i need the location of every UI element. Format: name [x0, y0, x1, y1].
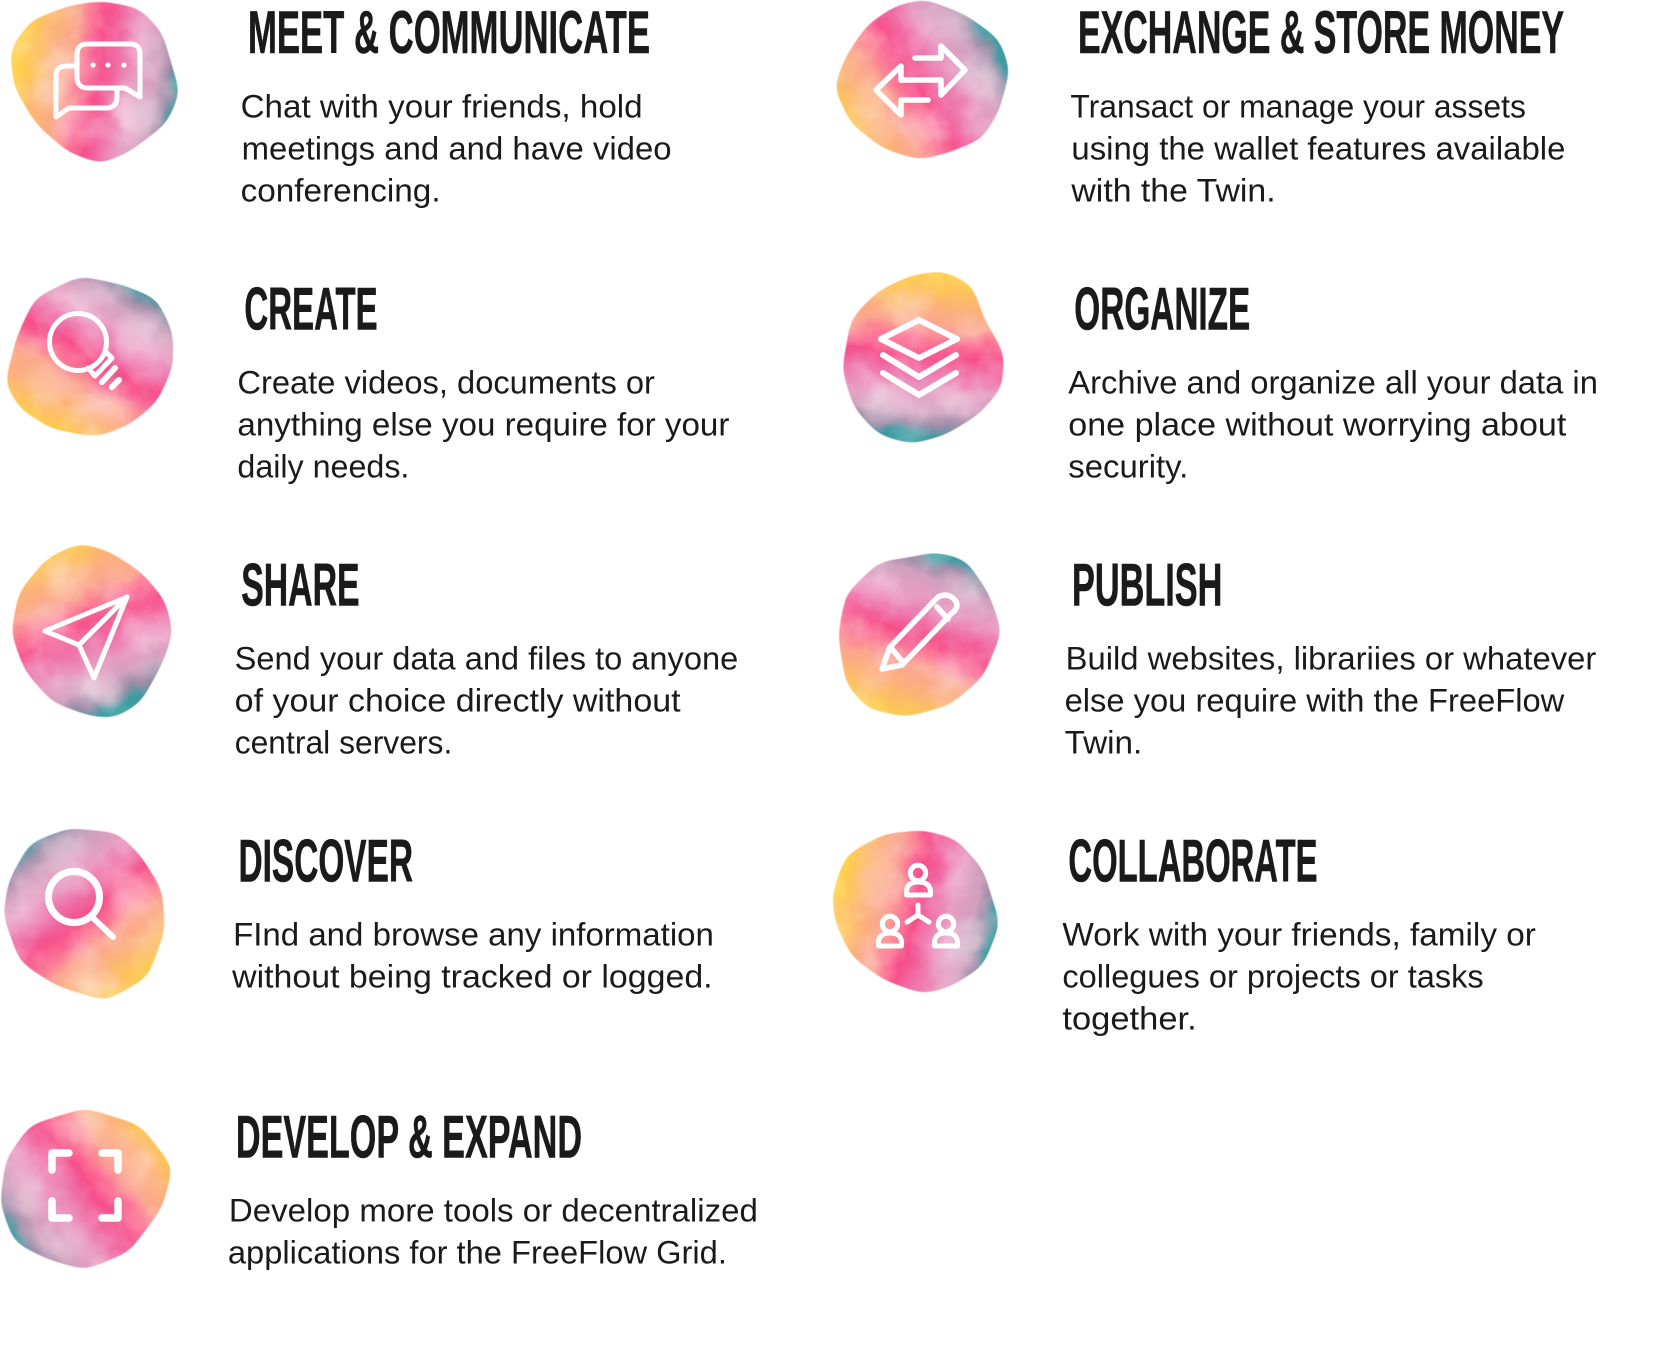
- heading: PUBLISH: [1072, 552, 1222, 618]
- text block: Create videos, documents or: [237, 364, 655, 400]
- text block: else you require with the FreeFlow: [1065, 682, 1565, 718]
- heading: CREATE: [244, 276, 378, 342]
- panel: meet and communicate: [0, 0, 672, 208]
- text block: meetings and and have video: [242, 130, 672, 166]
- text block: without being tracked or logged.: [231, 958, 713, 994]
- text block: [228, 1192, 758, 1270]
- icon: connected people: [832, 830, 998, 993]
- text block: [241, 88, 672, 208]
- text block: collegues or projects or tasks: [1062, 958, 1484, 994]
- heading: SHARE: [241, 552, 360, 618]
- text block: [1062, 916, 1536, 1036]
- panel: organize: [825, 255, 1598, 484]
- heading: ORGANIZE: [1074, 276, 1250, 342]
- text block: [1070, 88, 1565, 208]
- text block: Develop more tools or decentralized: [229, 1192, 758, 1228]
- text block: Chat with your friends, hold: [241, 88, 643, 124]
- text block: conferencing.: [241, 172, 441, 208]
- text block: [231, 916, 714, 994]
- icon: bulb: [6, 278, 174, 436]
- text block: using the wallet features available: [1071, 130, 1565, 166]
- icon: paper plane: [12, 544, 172, 718]
- text block: daily needs.: [237, 448, 409, 484]
- heading: COLLABORATE: [1068, 827, 1318, 894]
- text block: Archive and organize all your data in: [1068, 364, 1598, 400]
- text block: Transact or manage your assets: [1070, 88, 1526, 124]
- icon: layers: [842, 272, 1004, 443]
- panel: discover: [4, 828, 712, 999]
- text block: applications for the FreeFlow Grid.: [228, 1234, 727, 1270]
- text block: Send your data and files to anyone: [235, 640, 738, 676]
- text block: [1065, 640, 1597, 760]
- text block: [237, 364, 730, 484]
- text block: Work with your friends, family or: [1062, 916, 1536, 952]
- text block: with the Twin.: [1070, 172, 1276, 208]
- text block: together.: [1062, 1000, 1197, 1036]
- text block: security.: [1068, 448, 1188, 484]
- panel: exchange and store money: [815, 0, 1565, 208]
- text block: FInd and browse any information: [233, 916, 714, 952]
- text block: Build websites, librariies or whatever: [1066, 640, 1597, 676]
- text block: Twin.: [1065, 724, 1142, 760]
- text block: central servers.: [235, 724, 452, 760]
- icon: pencil: [838, 552, 1000, 716]
- icon: exchange arrows: [836, 0, 1009, 159]
- heading: DEVELOP & EXPAND: [236, 1103, 582, 1170]
- text block: one place without worrying about: [1068, 406, 1566, 442]
- icon: expand corners: [0, 1110, 171, 1268]
- heading: DISCOVER: [238, 827, 413, 894]
- panel: create: [0, 260, 730, 484]
- icon: magnifier: [4, 828, 165, 999]
- icon: chat bubbles: [10, 2, 178, 162]
- text block: [235, 640, 738, 760]
- panel: share: [12, 544, 737, 754]
- text block: of your choice directly without: [235, 682, 681, 718]
- panel: publish: [838, 552, 1596, 754]
- text block: [1068, 364, 1598, 484]
- panel: develop and expand: [0, 1110, 756, 1270]
- heading: MEET & COMMUNICATE: [248, 0, 650, 66]
- text block: anything else you require for your: [237, 406, 730, 442]
- panel: collaborate: [832, 830, 1536, 1036]
